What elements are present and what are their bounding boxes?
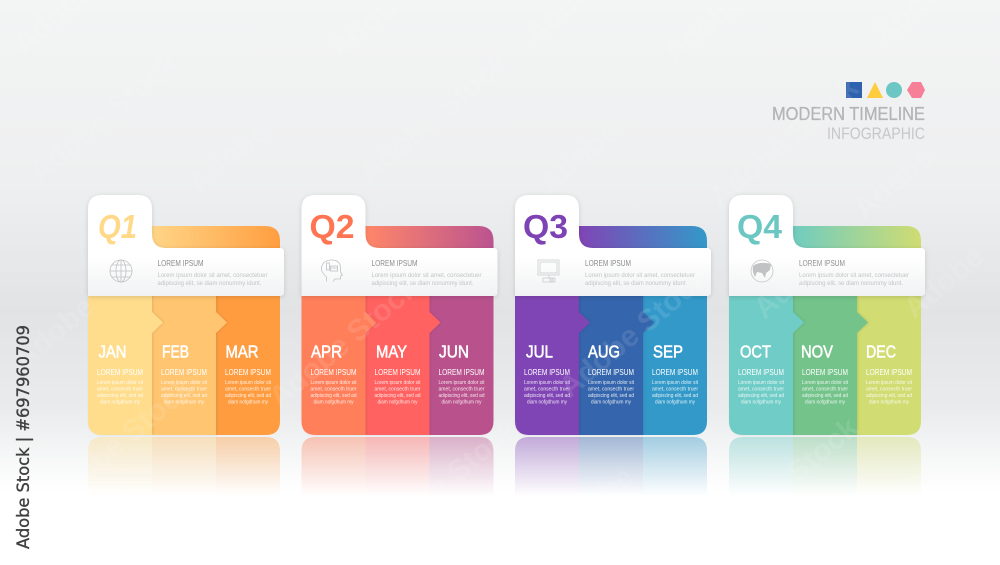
OCT: OCT <box>740 342 771 362</box>
MAY <box>374 342 421 406</box>
SEP: Lorem ipsum dolor sit <box>652 380 698 386</box>
NOV <box>801 342 848 406</box>
DEC: Lorem ipsum dolor sit <box>866 380 912 386</box>
panel: Q3 <box>515 195 711 497</box>
reflection <box>88 437 280 490</box>
NOV: amet, consecth truer <box>802 386 848 392</box>
NOV: NOV <box>801 342 833 362</box>
panel: Q2 <box>302 195 498 497</box>
month columns <box>88 290 280 435</box>
month columns <box>729 290 921 435</box>
FEB: diam nofgdhum my <box>164 400 204 406</box>
NOV: LOREM IPSUM <box>802 368 848 377</box>
AUG: AUG <box>588 342 620 362</box>
description: LOREM IPSUM <box>585 259 631 268</box>
header band <box>152 226 280 252</box>
MAR: diam nofgdhum my <box>228 400 268 406</box>
JUL <box>524 342 570 406</box>
description: Lorem ipsum dolor sit amet, consectetuer <box>799 272 910 279</box>
header band <box>793 226 921 252</box>
JAN <box>97 342 143 406</box>
watermark: Adobe Stock <box>703 71 865 214</box>
description: Lorem ipsum dolor sit amet, consectetuer <box>372 272 482 279</box>
SEP: SEP <box>653 342 683 362</box>
DEC: amet, consecth truer <box>866 386 912 392</box>
description: Lorem ipsum dolor sit amet, consectetuer <box>585 272 696 279</box>
JAN: amet, consecth truer <box>97 386 143 392</box>
JUL: Lorem ipsum dolor sit <box>524 380 570 386</box>
FEB: FEB <box>162 342 189 362</box>
NOV: diam nofgdhum my <box>805 400 845 406</box>
JUN <box>438 342 485 406</box>
header band <box>366 226 494 252</box>
title: MODERN TIMELINE <box>772 104 925 124</box>
Q1 label: Q1 <box>98 208 137 245</box>
description: Lorem ipsum dolor sit amet, consectetuer <box>158 272 268 279</box>
reflection <box>729 437 921 488</box>
APR: amet, consecth truer <box>310 386 357 392</box>
MAY: adipiscing elit, sed ad <box>374 393 420 399</box>
FEB <box>161 342 207 406</box>
AUG: amet, consecth truer <box>588 386 634 392</box>
month columns <box>302 290 494 435</box>
AUG: LOREM IPSUM <box>588 368 634 377</box>
MAR: LOREM IPSUM <box>225 368 271 377</box>
FEB: adipiscing elit, sed ad <box>161 393 207 399</box>
white panel and tab <box>729 195 925 296</box>
OCT: adipiscing elit, sed ad <box>738 393 784 399</box>
APR: diam nofgdhum my <box>314 400 354 406</box>
watermark: Adobe Stock <box>263 271 425 414</box>
DEC: DEC <box>866 342 896 362</box>
white panel and tab <box>88 195 284 296</box>
JUN: amet, consecth truer <box>438 386 485 392</box>
JUL: amet, consecth truer <box>524 386 570 392</box>
watermark: Adobe <box>8 290 100 375</box>
watermark: Adobe <box>868 440 960 525</box>
DEC: diam nofgdhum my <box>869 400 909 406</box>
MAY: amet, consecth truer <box>374 386 421 392</box>
watermark: Adobe Stock <box>703 411 865 554</box>
watermark: Adobe Stock <box>23 46 185 189</box>
watermark: Adobe <box>898 240 990 325</box>
icon: head <box>321 260 342 282</box>
JUN: adipiscing elit, sed ad <box>438 393 484 399</box>
NOV: adipiscing elit, sed ad <box>802 393 848 399</box>
JUN: Lorem ipsum dolor sit <box>438 380 485 386</box>
description: adipiscing elit, se diam nonummy idunt. <box>799 280 903 287</box>
SEP <box>652 342 698 406</box>
JUL: diam nofgdhum my <box>527 400 567 406</box>
description <box>372 259 482 287</box>
OCT: diam nofgdhum my <box>741 400 781 406</box>
JUN: LOREM IPSUM <box>438 368 484 377</box>
description: adipiscing elit, se diam nonummy idunt. <box>585 280 687 287</box>
JAN: adipiscing elit, sed ad <box>97 393 143 399</box>
watermark: Adobe Stock <box>363 411 525 554</box>
MAY: MAY <box>376 342 407 362</box>
month columns <box>515 290 707 435</box>
reflection <box>302 437 494 490</box>
header band <box>579 226 707 252</box>
JUN: JUN <box>439 342 469 362</box>
description: LOREM IPSUM <box>372 259 418 268</box>
AUG <box>588 342 634 406</box>
watermark: Adobe Stock <box>38 371 200 514</box>
JAN: JAN <box>98 342 126 362</box>
description: LOREM IPSUM <box>799 259 845 268</box>
FEB: amet, consecth truer <box>161 386 207 392</box>
DEC: adipiscing elit, sed ad <box>866 393 912 399</box>
OCT: amet, consecth truer <box>738 386 784 392</box>
reflection <box>515 437 707 490</box>
watermark: Adobe <box>198 470 290 555</box>
description <box>585 259 696 287</box>
description <box>799 259 910 287</box>
SEP: amet, consecth truer <box>652 386 698 392</box>
description <box>158 259 268 287</box>
FEB: LOREM IPSUM <box>161 368 207 377</box>
MAR: MAR <box>226 342 258 362</box>
icon: world map <box>751 260 773 282</box>
watermark: Adobe <box>533 115 625 200</box>
SEP: diam nofgdhum my <box>655 400 695 406</box>
Q3 label: Q3 <box>523 208 568 245</box>
watermark: Adobe <box>848 140 940 225</box>
MAR: amet, consecth truer <box>225 386 271 392</box>
AUG: diam nofgdhum my <box>591 400 631 406</box>
icon: globe <box>110 260 132 282</box>
MAR: adipiscing elit, sed ad <box>225 393 271 399</box>
SEP: LOREM IPSUM <box>652 368 698 377</box>
panel: Q1 <box>88 195 284 497</box>
description: adipiscing elit, se diam nonummy idunt. <box>372 280 474 287</box>
MAY: Lorem ipsum dolor sit <box>374 380 421 386</box>
MAY: diam nofgdhum my <box>378 400 418 406</box>
watermark: Adobe Stock <box>553 261 715 404</box>
JUN: diam nofgdhum my <box>442 400 482 406</box>
JUL: adipiscing elit, sed ad <box>524 393 570 399</box>
FEB: Lorem ipsum dolor sit <box>161 380 207 386</box>
SEP: adipiscing elit, sed ad <box>652 393 698 399</box>
JAN: diam nofgdhum my <box>100 400 140 406</box>
panel: Q4 <box>729 195 925 497</box>
Q2 label: Q2 <box>310 208 354 245</box>
white panel and tab <box>302 195 498 296</box>
watermark: Adobe <box>183 115 275 200</box>
description: LOREM IPSUM <box>158 259 204 268</box>
MAR <box>225 342 271 406</box>
watermark: Adobe <box>548 460 640 545</box>
legend shapes <box>846 82 925 98</box>
Q4 label: Q4 <box>737 208 783 245</box>
title: INFOGRAPHIC <box>827 124 925 143</box>
JUL: JUL <box>526 342 553 362</box>
watermark: Adobe Stock <box>353 46 515 189</box>
white panel and tab <box>515 195 711 296</box>
stock id text: Adobe Stock | #697960709 <box>14 325 34 549</box>
OCT: Lorem ipsum dolor sit <box>738 380 784 386</box>
AUG: Lorem ipsum dolor sit <box>588 380 634 386</box>
JUL: LOREM IPSUM <box>524 368 570 377</box>
DEC <box>866 342 912 406</box>
APR: APR <box>311 342 342 362</box>
JAN: Lorem ipsum dolor sit <box>97 380 143 386</box>
NOV: Lorem ipsum dolor sit <box>802 380 848 386</box>
MAY: LOREM IPSUM <box>374 368 420 377</box>
APR: Lorem ipsum dolor sit <box>310 380 357 386</box>
JAN: LOREM IPSUM <box>97 368 143 377</box>
watermark: Adobe <box>748 240 840 325</box>
DEC: LOREM IPSUM <box>866 368 912 377</box>
APR: adipiscing elit, sed ad <box>310 393 356 399</box>
OCT <box>738 342 784 406</box>
OCT: LOREM IPSUM <box>738 368 784 377</box>
title <box>772 104 925 143</box>
APR: LOREM IPSUM <box>310 368 356 377</box>
APR <box>310 342 357 406</box>
MAR: Lorem ipsum dolor sit <box>225 380 271 386</box>
description: adipiscing elit, se diam nonummy idunt. <box>158 280 262 287</box>
AUG: adipiscing elit, sed ad <box>588 393 634 399</box>
icon: monitor <box>538 260 559 282</box>
